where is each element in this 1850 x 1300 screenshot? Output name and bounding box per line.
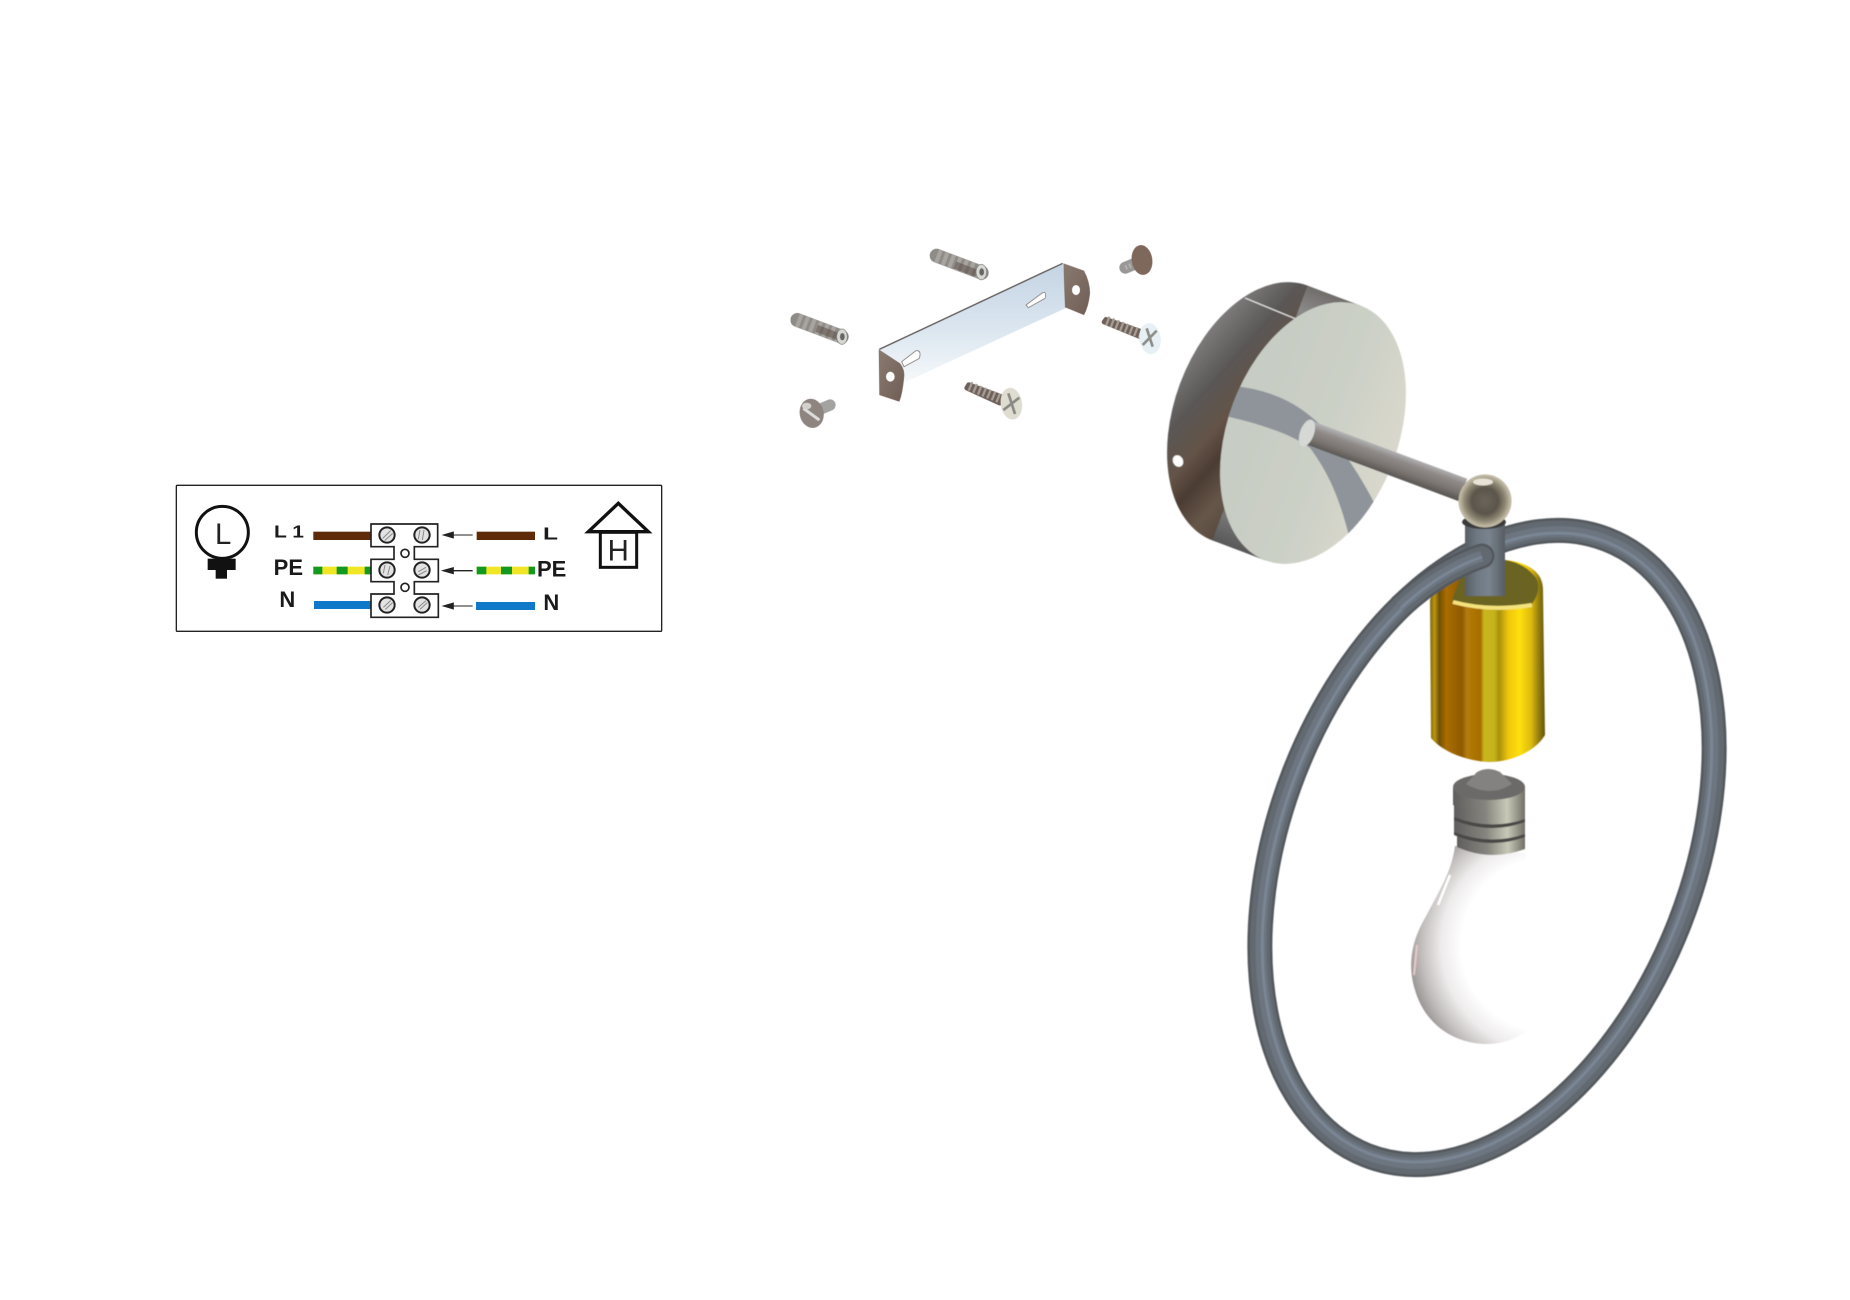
icon: lamp symbol: L <box>215 518 231 551</box>
wall dowel lower <box>797 320 847 344</box>
light bulb <box>1411 769 1570 1044</box>
icon: house symbol <box>588 503 648 568</box>
mounting hardware <box>797 244 1163 430</box>
label: N left: N <box>279 587 295 612</box>
wood screw right <box>1104 319 1163 356</box>
lamp screw cap <box>1453 769 1525 855</box>
canopy disc <box>1166 281 1406 564</box>
label: L right: L <box>543 523 559 543</box>
wall dowel upper <box>937 256 987 280</box>
label: N right: N <box>543 590 559 615</box>
label: PE right: PE <box>537 557 566 582</box>
socket cup <box>1430 560 1545 762</box>
arm <box>1296 417 1463 490</box>
wire: blue right <box>476 602 535 610</box>
wire: brown left <box>313 532 371 540</box>
wood screw lower <box>967 385 1024 421</box>
ring shade <box>1174 464 1800 1231</box>
panel frame <box>176 485 662 631</box>
stem <box>1465 522 1505 596</box>
label: PE left: PE <box>274 555 303 580</box>
lamp <box>1166 281 1728 1178</box>
icon: house symbol: H <box>608 535 629 568</box>
wire: brown right <box>477 532 535 540</box>
wire: earth right <box>477 567 535 574</box>
mounting bracket <box>879 263 1090 402</box>
ring front section <box>1400 544 1494 608</box>
wiring diagram panel <box>176 485 662 631</box>
terminal block <box>371 524 438 617</box>
label: L1 left: L 1 <box>274 521 304 541</box>
washer bolt top right <box>1125 244 1154 276</box>
arrows into terminal <box>443 532 473 609</box>
wire: blue left <box>314 601 371 609</box>
wire: earth left <box>313 567 371 574</box>
icon: lamp symbol <box>196 506 248 579</box>
ball joint <box>1458 474 1512 529</box>
mushroom bolt lower left <box>797 396 830 430</box>
